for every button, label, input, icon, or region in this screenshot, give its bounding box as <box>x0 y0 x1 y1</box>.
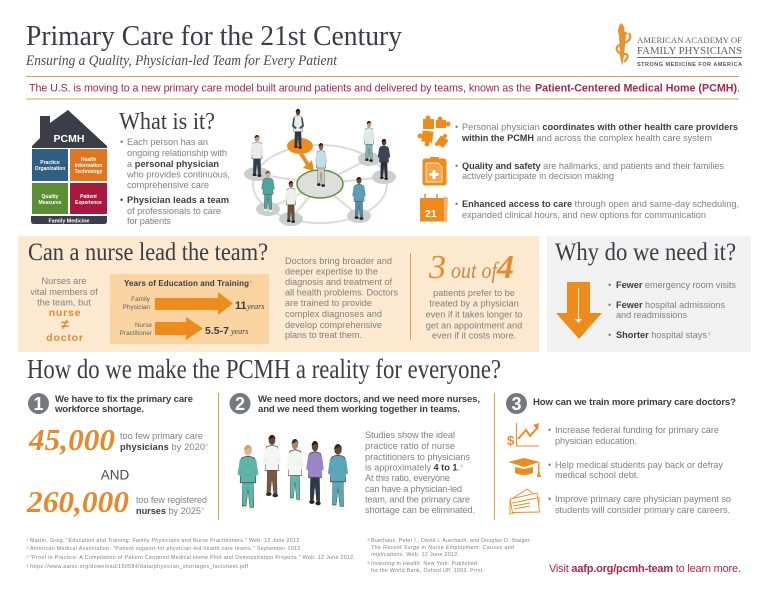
chart: years of education and training: 1 <box>250 280 252 284</box>
footnotes: 1 <box>26 538 28 542</box>
stat description: get an appointment and <box>426 320 522 330</box>
feature: enhanced access <box>455 199 739 220</box>
icon: puzzle pieces <box>418 116 450 148</box>
bar: nurse practitioner: Nurse <box>135 322 152 329</box>
training bullets: Improve primary care physician payment so <box>555 494 731 504</box>
number badge 1 <box>28 393 49 414</box>
nurse not equal doctor: nurse <box>49 307 81 319</box>
ratio text: practitioners to physicians <box>365 452 470 462</box>
heading: Why do we need it? <box>555 239 736 266</box>
footnotes: 4 <box>26 564 28 568</box>
feature: quality and safety: • <box>455 161 458 171</box>
benefits list <box>608 280 736 340</box>
section heading: how do we make the PCMH a reality: How do we make the PCMH a reality for everyone? <box>27 354 501 384</box>
illustration: care team <box>239 435 347 511</box>
footnotes: 5 <box>368 538 370 542</box>
nurse not equal doctor: doctor <box>46 332 84 344</box>
training bullets: students will consider primary care careers. <box>555 505 730 515</box>
what is it: bullets: • <box>120 195 123 205</box>
footnotes: for the World Bank, Oxford UP, 1993. Print. <box>371 568 484 574</box>
footnotes: https://www.aamc.org/download/150584/data/physician_shortages_factsheet.pdf <box>30 564 249 570</box>
nurse not equal doctor: ≠ <box>61 316 69 332</box>
stat description: even if it costs more. <box>432 330 516 340</box>
footnotes: The Recent Surge in Nurse Employment: Causes and <box>371 545 515 551</box>
stat description: treated by a physician <box>429 298 519 308</box>
block: practice organization <box>32 149 68 181</box>
call to action: Visit aafp.org/pcmh-team to learn more. <box>549 563 741 575</box>
icon: funding chart: $ <box>507 433 515 448</box>
chart: years of education and training: Years of Education and Training <box>124 279 249 288</box>
PCMH house diagram <box>31 110 107 224</box>
what is it: bullets: a personal physician <box>127 159 219 169</box>
ratio text: Studies show the ideal <box>365 430 455 440</box>
icon: down arrow <box>556 282 602 339</box>
ratio text: practice ratio of nurse <box>365 441 455 451</box>
block: practice organization: Organization <box>35 166 65 172</box>
ratio text: is approximately 4 to 1. <box>365 462 460 472</box>
footnotes: Investing in Health. New York: Published <box>371 561 477 567</box>
ratio text: 6 <box>460 463 464 468</box>
column 1: workforce shortage <box>26 393 208 519</box>
what is it: bullets: • <box>120 137 123 147</box>
nurse not equal doctor: Nurses are <box>42 276 86 286</box>
intro banner: . <box>737 82 740 94</box>
training bullets: • <box>548 425 551 435</box>
number badge 2: 2 <box>235 394 245 414</box>
what is it: bullets: Each person has an <box>127 137 208 147</box>
icon: calendar <box>420 194 448 222</box>
ratio text <box>365 430 475 515</box>
stat description: patients prefer to be <box>433 288 515 298</box>
stat: 260,000: nurses by 2025 <box>136 506 201 516</box>
block: health information technology: Information <box>75 163 102 169</box>
benefits list: • <box>608 300 611 310</box>
training bullets: physician education. <box>555 436 637 446</box>
intro banner: Patient-Centered Medical Home (PCMH) <box>535 82 737 94</box>
what is it: bullets: Physician leads a team <box>127 195 229 205</box>
benefits list: Fewer emergency room visits <box>616 280 736 290</box>
training bullets: Help medical students pay back or defray <box>555 460 723 470</box>
doctors expertise text <box>285 256 398 340</box>
feature: quality and safety: Quality and safety are hallmarks, and patients and their families <box>462 161 724 171</box>
panel: can a nurse lead the team <box>18 236 539 352</box>
what is it: bullets: comprehensive care <box>127 180 209 190</box>
orange patient node and arrow <box>287 138 314 171</box>
column 3 heading: How can we train more primary care doctors? <box>533 397 736 408</box>
what is it: bullets: ongoing relationship with <box>127 148 227 158</box>
bar: nurse practitioner: 5.5-7 <box>205 325 229 337</box>
benefits list: • <box>608 330 611 340</box>
block: patient experience: Patient <box>80 194 97 200</box>
nurse not equal doctor <box>30 276 98 344</box>
feature: coordination <box>455 122 738 143</box>
icon: funding chart <box>507 423 539 448</box>
nurse not equal doctor: the team, but <box>37 298 91 308</box>
column 1 heading: workforce shortage. <box>54 404 144 415</box>
stat: 260,000: 5 <box>202 506 204 511</box>
intro banner <box>26 76 740 99</box>
center node <box>297 170 343 198</box>
nurse not equal doctor: vital members of <box>30 287 98 297</box>
training bullets <box>548 425 731 515</box>
block: health information technology <box>70 149 107 181</box>
doctors expertise text: complex diagnoses and <box>285 309 382 319</box>
block: quality measures: Quality <box>42 194 59 200</box>
benefits list: and readmissions <box>616 310 687 320</box>
footnotes: 2 <box>26 546 28 550</box>
footnotes: "Proof in Practice: A Compilation of Patient Centered Medical Home Pilot and Demonstration Projects." Web. 12 June 2012. <box>30 555 355 561</box>
column 2 heading: We need more doctors, and we need more nurses, <box>258 394 480 405</box>
block: health information technology: Technology <box>75 169 103 175</box>
bar: nurse practitioner <box>120 317 248 340</box>
footnotes: 3 <box>26 555 28 559</box>
logo: American Academy of Family Physicians: STRONG MEDICINE FOR AMERICA <box>637 62 742 68</box>
ratio text: can have a physician-led <box>365 484 462 494</box>
doctors expertise text: deeper expertise to the <box>285 266 378 276</box>
what is it: bullets: of professionals to care <box>127 206 221 216</box>
benefits list: 3 <box>708 331 711 336</box>
panel: why do we need it <box>547 236 751 352</box>
bar: family physician: 11 <box>235 300 247 312</box>
stat: 260,000: 260,000 <box>26 484 129 519</box>
icon: calendar: 21 <box>425 208 437 220</box>
benefits list: Shorter hospital stays <box>616 330 707 340</box>
what is it: heading: What is it? <box>119 108 215 135</box>
doctors expertise text: plans to treat them. <box>285 330 362 340</box>
feature: coordination: Personal physician coordinates with other health care providers <box>462 122 738 132</box>
feature: enhanced access: • <box>455 199 458 209</box>
bar: nurse practitioner: Practitioner <box>120 330 153 337</box>
doctors expertise text: diagnosis and treatment of <box>285 277 392 287</box>
feature: coordination: within the PCMH and across the complex health care system <box>461 133 712 143</box>
icon: payment cards <box>510 489 540 514</box>
stat: 45,000: too few primary care <box>120 431 203 441</box>
intro banner: The U.S. is moving to a new primary care model built around patients and delivered by teams, known as the <box>29 82 531 94</box>
feature: quality and safety: actively participate in decision making <box>462 171 614 181</box>
column 1 heading <box>54 394 193 415</box>
feature: enhanced access: Enhanced access to care through open and same-day scheduling, <box>462 199 739 209</box>
logo wordmark: AMERICAN ACADEMY OF <box>637 35 742 45</box>
feature: quality and safety <box>455 161 724 181</box>
logo: American Academy of Family Physicians: FAMILY PHYSICIANS <box>637 45 742 57</box>
benefits list: • <box>608 280 611 290</box>
footnotes: Martin, Greg. "Education and Training: Family Physicians and Nurse Practitioners." Web. 12 June 2012. <box>30 538 301 544</box>
block: quality measures <box>32 183 68 214</box>
ratio text: At this ratio, everyone <box>365 473 450 483</box>
icon: staff and serpent <box>617 23 630 66</box>
ring nodes <box>244 152 396 226</box>
doctors expertise text: develop comprehensive <box>285 320 382 330</box>
PCMH features list <box>418 116 739 222</box>
footnotes: Buerhaus, Peter I., David I. Auerbach, and Douglas O. Staiger. <box>371 538 531 544</box>
bar: family physician: years <box>246 302 264 311</box>
bar: family physician <box>123 292 264 315</box>
stat: 260,000: too few registered <box>136 495 207 505</box>
footnotes: Implications. Web. 12 June 2012. <box>371 552 459 558</box>
doctors expertise text: all health problems. Doctors <box>285 288 398 298</box>
house roof <box>32 110 107 148</box>
stat: 45,000: 45,000 <box>28 422 115 457</box>
what is it: bullets <box>120 137 230 226</box>
stat: 3 out of 4: 3 <box>428 249 446 286</box>
stat: 3 out of 4 <box>428 249 514 286</box>
bar: family physician: Family <box>131 296 151 303</box>
block: patient experience: Experience <box>75 200 102 206</box>
icon: clipboard <box>423 157 446 185</box>
stat: 260,000 <box>26 484 207 519</box>
care team figures <box>251 109 389 223</box>
title: Primary Care for the 21st Century <box>26 21 402 52</box>
block: patient experience <box>70 183 107 214</box>
AND: AND <box>101 468 129 482</box>
feature: coordination: • <box>455 122 458 132</box>
stat: 3 out of 4: out of <box>451 258 500 283</box>
feature: enhanced access: expanded clinical hours, and new options for communication <box>462 210 706 220</box>
column 2 heading: and we need them working together in teams. <box>258 404 460 415</box>
heading: Can a nurse lead the team? <box>28 239 268 266</box>
number badge 1: 1 <box>33 394 44 414</box>
column 3: training more doctors <box>506 393 736 515</box>
stat: 45,000 <box>28 422 208 457</box>
subtitle: Ensuring a Quality, Physician-led Team for Every Patient <box>25 53 338 69</box>
bar: nurse practitioner: years <box>230 327 248 336</box>
icon: graduation cap <box>508 458 541 477</box>
ratio text: team, and the primary care <box>365 494 470 504</box>
block: practice organization: Practice <box>40 160 60 166</box>
benefits list: Fewer hospital admissions <box>616 300 725 310</box>
stat: 3 out of 4: 4 <box>496 249 514 286</box>
bar: family physician: Physician <box>123 304 150 311</box>
column 2 heading <box>258 394 480 415</box>
stat: 45,000: 4 <box>206 442 208 447</box>
ratio text: shortage can be eliminated. <box>365 505 475 515</box>
footnotes: 6 <box>368 561 370 565</box>
doctors expertise text: are trained to provide <box>285 298 372 308</box>
stat description <box>425 288 523 340</box>
block: health information technology: Health <box>81 157 96 163</box>
number badge 3: 3 <box>511 394 522 414</box>
number badge 3 <box>506 393 527 414</box>
stat: 45,000: physicians by 2020 <box>120 442 205 452</box>
logo: American Academy of Family Physicians <box>617 23 742 68</box>
what is it: bullets: who provides continuous, <box>126 170 230 180</box>
training bullets: • <box>548 494 551 504</box>
training bullets: Increase federal funding for primary care <box>555 425 719 435</box>
training bullets: medical school debt. <box>555 470 639 480</box>
family medicine base: Family Medicine <box>49 218 90 224</box>
what is it: bullets: for patients <box>127 216 171 226</box>
doctors expertise text: Doctors bring broader and <box>285 256 392 266</box>
PCMH house diagram: PCMH <box>54 133 84 145</box>
stat description: even if it takes longer to <box>425 310 523 320</box>
number badge 2 <box>230 393 250 414</box>
block: quality measures: Measures <box>38 200 62 206</box>
column 2: more doctors and nurses <box>230 393 480 515</box>
team-centered care network diagram <box>244 109 396 226</box>
footnotes: American Medical Association. "Patient support for physician-led health care teams." September 2012. <box>30 546 302 552</box>
column 1 heading: We have to fix the primary care <box>55 394 193 405</box>
chart: years of education and training <box>110 274 269 344</box>
training bullets: • <box>548 460 551 470</box>
footnotes <box>26 538 531 574</box>
connection ring <box>253 145 387 223</box>
